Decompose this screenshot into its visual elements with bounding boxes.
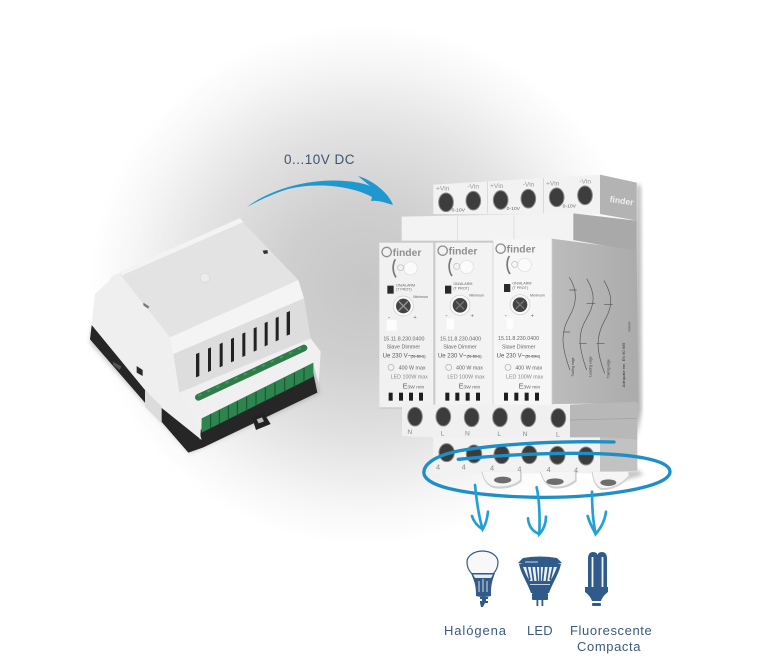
module 1: Ue 230 V~ <box>383 353 412 359</box>
module 2: ON/ALARM <box>453 282 472 286</box>
lower terminals: N <box>407 429 412 436</box>
top terminal block: -Vin <box>467 184 479 191</box>
lower terminals: 4 <box>517 464 521 473</box>
module backing <box>379 241 553 409</box>
module 2: LED 100W max <box>447 375 485 381</box>
top terminal block: 0-10V <box>563 203 577 209</box>
module 2: Slave Dimmer <box>443 345 477 351</box>
middle housing <box>402 213 637 252</box>
module 3: ON/ALARM <box>512 282 531 286</box>
module 3: finder <box>507 245 535 256</box>
module 1: - <box>388 314 390 321</box>
side panel with waveforms: Trailing edge <box>606 359 610 378</box>
module 3: 3W min <box>523 385 540 391</box>
background glow <box>60 20 680 560</box>
module 1: finder <box>393 248 421 259</box>
module 1: (T PROT) <box>396 288 412 292</box>
module 3: 15.11.8.230.0400 <box>498 336 539 342</box>
top terminal block: +Vin <box>436 186 450 193</box>
top terminal block: -Vin <box>579 178 591 185</box>
module 2: 15.11.8.230.0400 <box>440 336 481 342</box>
controller device <box>90 218 321 453</box>
label: fluorescent compact: Fluorescente <box>570 623 652 638</box>
module 2: - <box>445 313 448 320</box>
module 2: 3W min <box>463 385 480 391</box>
arrow: 0...10V DC signal <box>247 176 393 207</box>
lower terminals: L <box>497 431 501 438</box>
module 2: Minimum <box>469 294 484 298</box>
module 1: (50-60Hz) <box>411 354 425 358</box>
arrow: to fluorescent <box>588 492 606 534</box>
module 3: (50-60Hz) <box>525 354 540 358</box>
module 1: LED 100W max <box>391 375 428 381</box>
lower terminals: L <box>441 430 445 437</box>
lower terminals: 4 <box>490 464 494 473</box>
top terminal block: -Vin <box>523 182 535 189</box>
module 2: (50-60Hz) <box>467 354 481 358</box>
module 3: + <box>531 313 535 319</box>
label: fluorescent compact: Compacta <box>577 639 641 654</box>
icon: compact fluorescent <box>585 552 608 606</box>
module 3: LED 100W max <box>506 375 544 381</box>
label: halogen: Halógena <box>444 623 507 638</box>
module 3: 400 W max <box>515 365 543 371</box>
lower terminals: 4 <box>436 462 440 471</box>
top terminal block <box>433 175 637 221</box>
module 2 <box>435 243 493 407</box>
dimmer assembly <box>379 175 642 437</box>
top terminal block: 0-10V <box>452 208 466 214</box>
module 1: 3W min <box>407 385 424 391</box>
side panel with waveforms: Trailing edge <box>571 357 575 377</box>
module 2: finder <box>449 247 477 258</box>
module 1: 15.11.8.230.0400 <box>383 336 424 342</box>
shadow <box>633 183 642 437</box>
loop: outputs highlight <box>424 442 670 497</box>
top terminal block: 0-10V <box>507 206 521 212</box>
module 2: (T PROT) <box>453 286 469 290</box>
lower terminals: N <box>523 431 528 438</box>
module 1: Slave Dimmer <box>387 345 420 351</box>
module 3: E <box>519 382 524 391</box>
side panel with waveforms <box>552 239 638 404</box>
label: LED: LED <box>527 623 553 638</box>
icon: LED spot <box>518 556 562 606</box>
lower terminals: N <box>465 430 470 437</box>
module 3: (T PROT) <box>512 286 528 290</box>
signal label: 0...10V DC <box>284 152 355 167</box>
side panel with waveforms: Adequate em. EN 60 669 <box>621 342 626 387</box>
top terminal block: finder <box>609 194 635 207</box>
lower terminals: 4 <box>574 466 578 475</box>
top terminal block: +Vin <box>490 183 504 190</box>
module 1: E <box>403 382 408 391</box>
icon: halogen bulb <box>467 551 498 607</box>
lower terminals: 4 <box>547 465 551 474</box>
module 1: 400 W max <box>399 365 426 371</box>
top terminal block: +Vin <box>546 180 560 187</box>
arrow: to halogen <box>472 485 488 529</box>
module 2: + <box>471 314 475 320</box>
arrow: to LED <box>528 487 546 534</box>
lower terminals: 4 <box>462 462 466 471</box>
module 3: - <box>505 312 507 319</box>
module 3: Ue 230 V~ <box>497 353 526 359</box>
module 1 <box>379 243 433 407</box>
module 2: E <box>459 382 464 391</box>
module 3: Minimum <box>530 293 545 297</box>
module 1: Minimum <box>413 295 428 299</box>
lower terminals: L <box>556 432 560 439</box>
module 3: Slave Dimmer <box>502 345 536 351</box>
lower terminals <box>402 402 643 490</box>
module 2: 400 W max <box>456 365 483 371</box>
module 2: Ue 230 V~ <box>438 353 467 359</box>
module 3 <box>493 239 552 405</box>
side panel with waveforms: Leading edge <box>589 356 593 377</box>
module 1: + <box>413 315 417 321</box>
module 1: ON/ALARM <box>396 283 415 287</box>
